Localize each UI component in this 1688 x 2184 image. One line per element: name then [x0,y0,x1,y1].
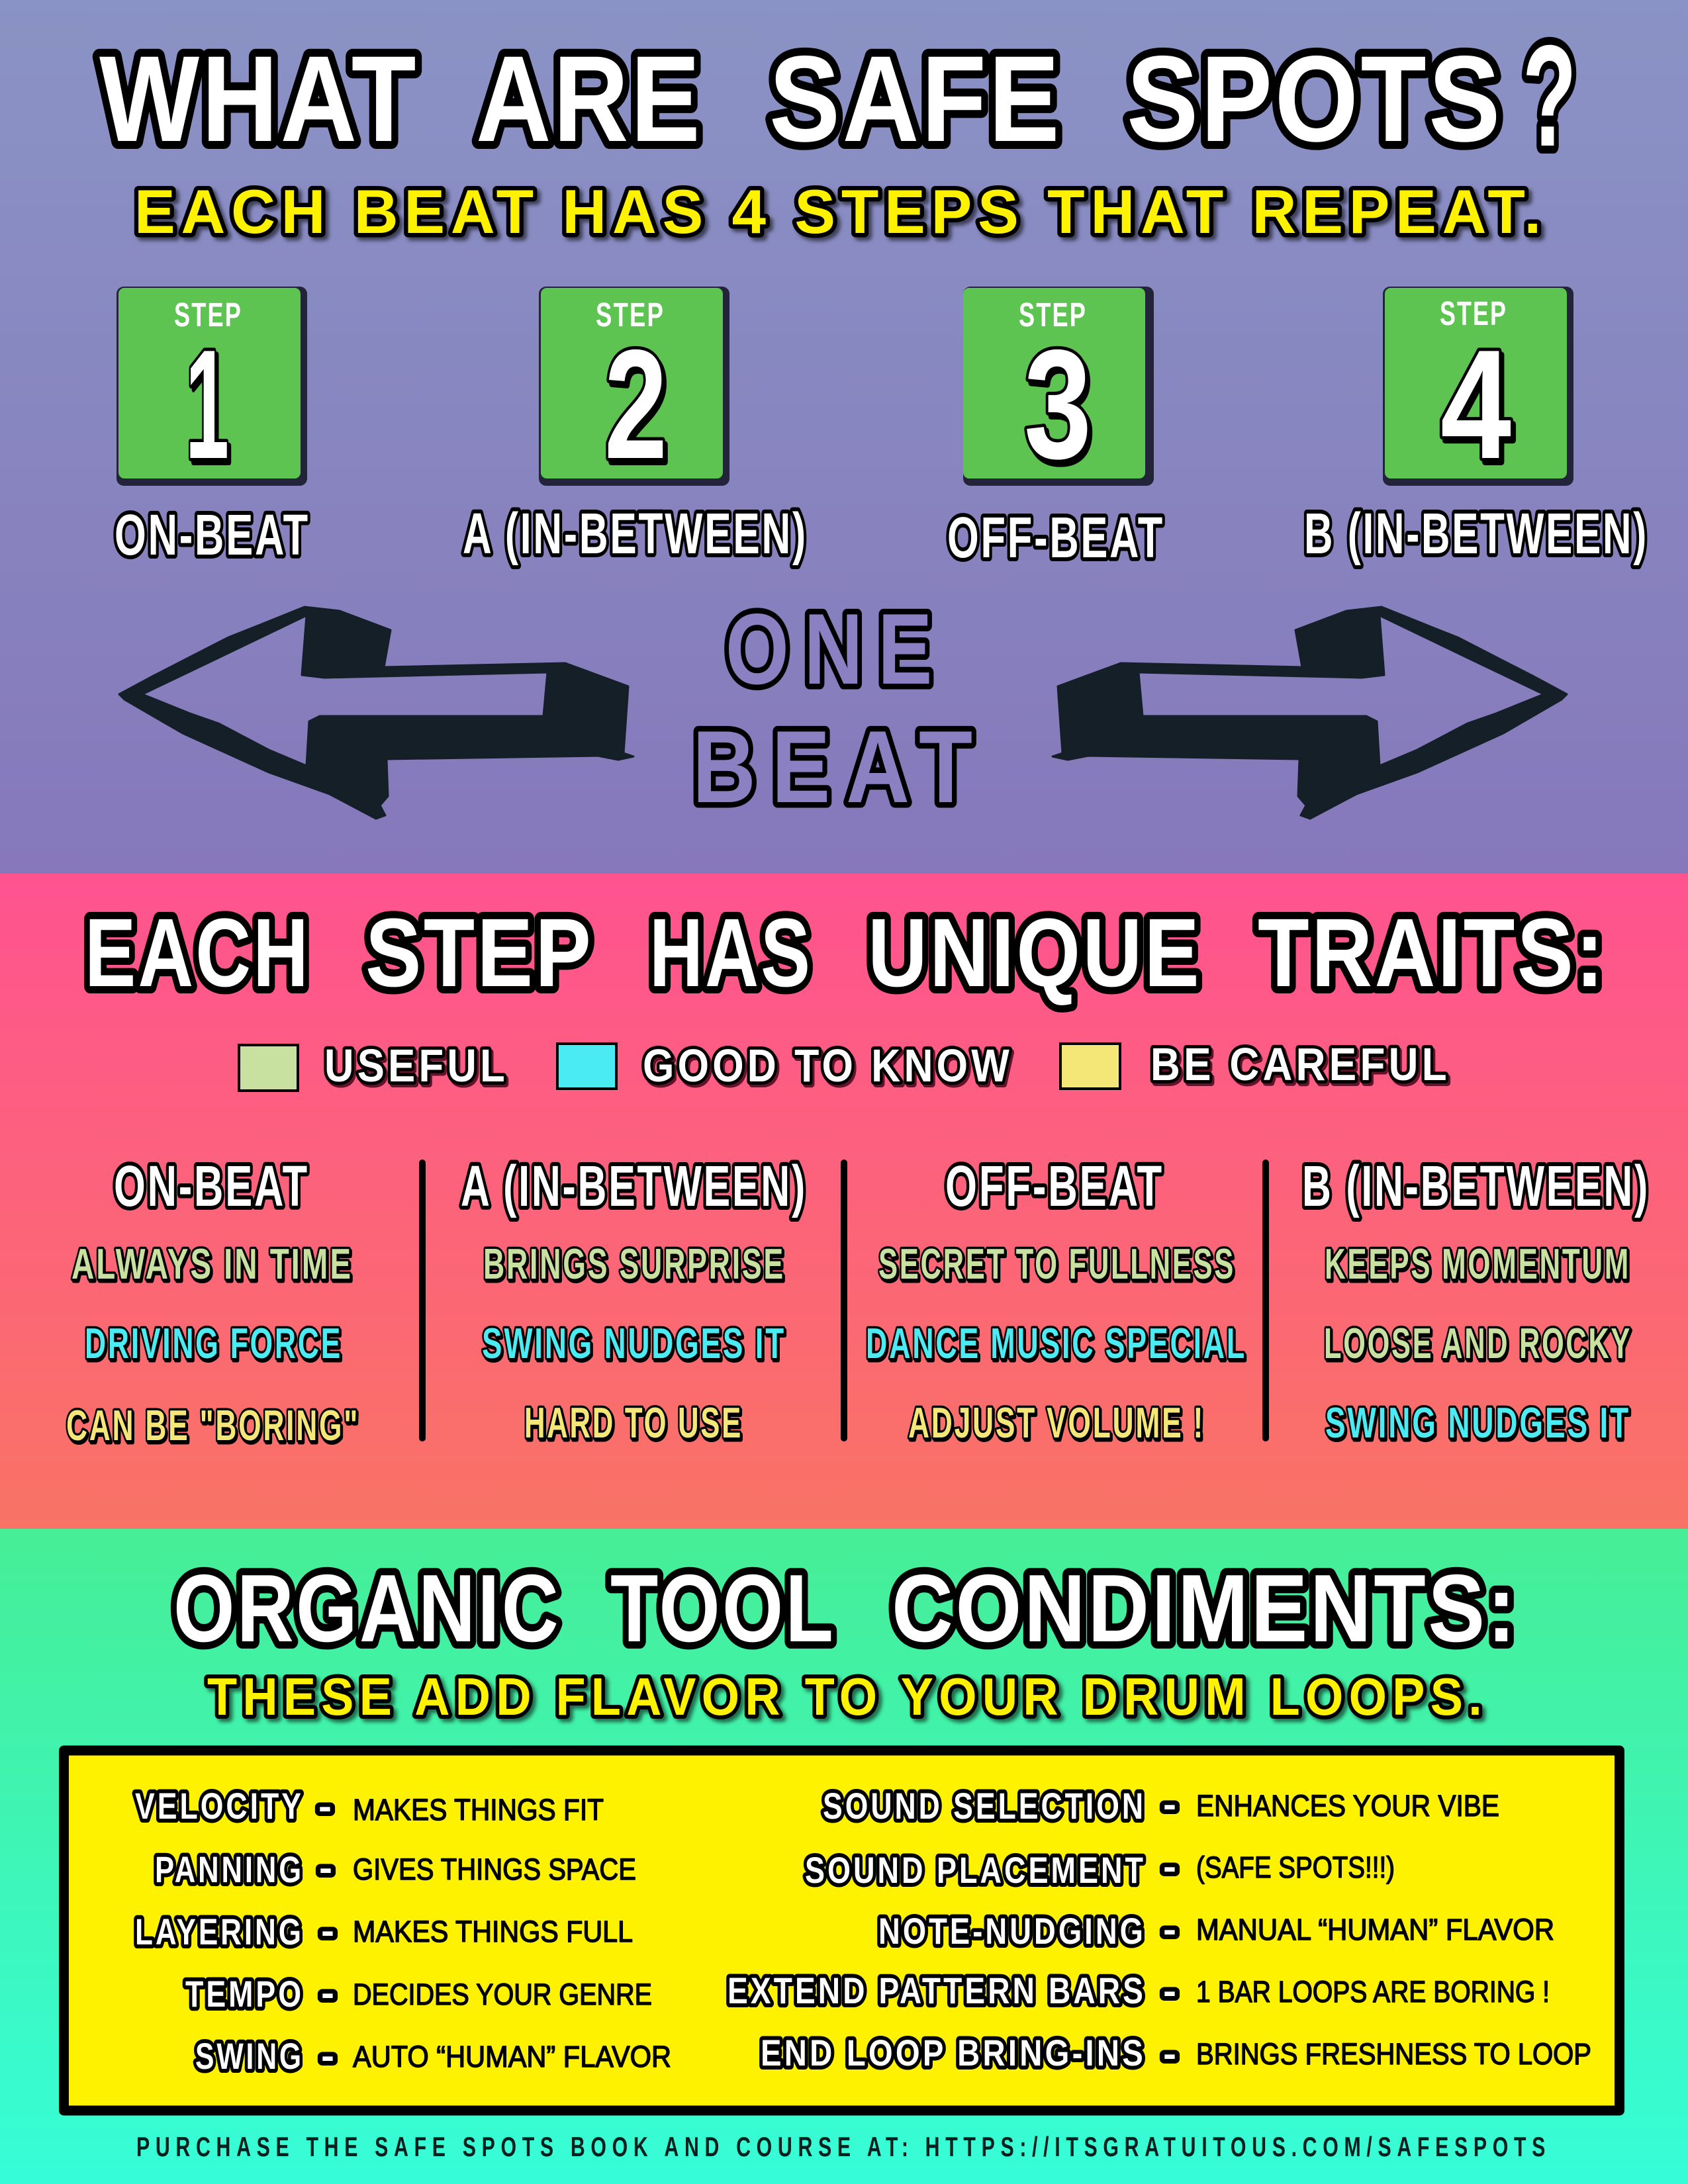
step card 4: STEP [1440,295,1507,332]
step label: on-beat: ON-BEAT [115,503,310,567]
column: off-beat: ADJUST VOLUME ! [908,1398,1205,1447]
row: end loop bring-ins: END LOOP BRING-INS [761,2032,1146,2073]
column: on-beat [66,1154,359,1449]
title: ARE [476,31,702,167]
arrow: right [1053,607,1567,819]
column: off-beat [866,1154,1246,1447]
legend: good to know: GOOD TO KNOW [643,1040,1013,1091]
row: layering [135,1909,633,1952]
row: layering: MAKES THINGS FULL [353,1915,633,1948]
row: swing [195,2034,671,2077]
legend: useful: USEFUL [324,1040,508,1091]
title: SPOTS [1127,31,1503,167]
row: note-nudging: NOTE-NUDGING [878,1910,1146,1952]
step card 3 [963,287,1154,491]
legend: be careful: BE CAREFUL [1150,1038,1450,1090]
row: panning: - [319,1846,332,1888]
row: velocity: MAKES THINGS FIT [353,1793,604,1827]
step card 4: 4 [1440,317,1511,491]
title: SAFE [769,31,1062,167]
column: a in-between [461,1154,807,1447]
column: on-beat: CAN BE "BORING" [66,1401,359,1449]
row: panning: PANNING [155,1848,304,1890]
row: sound selection: ENHANCES YOUR VIBE [1196,1789,1499,1823]
row: note-nudging: MANUAL “HUMAN” FLAVOR [1196,1913,1554,1946]
row: sound placement [805,1845,1395,1891]
row: velocity: - [318,1785,332,1827]
step card 1: 1 [185,317,229,491]
heading: each step has unique traits: TRAITS: [1258,899,1606,1007]
column: b in-between [1302,1154,1650,1447]
step card 2: 2 [604,317,667,491]
row: tempo: TEMPO [185,1973,304,2015]
panel: organic tool condiments [0,1529,1688,2184]
column: a in-between: BRINGS SURPRISE [483,1240,785,1288]
row: extend pattern bars [727,1970,1550,2011]
title: ? [1523,16,1578,177]
divider 2 [841,1163,847,1438]
column: off-beat: SECRET TO FULLNESS [878,1240,1235,1288]
row: panning: GIVES THINGS SPACE [353,1852,636,1886]
row: layering: - [321,1909,334,1951]
row: swing: AUTO “HUMAN” FLAVOR [353,2040,671,2073]
column: a in-between: A (IN-BETWEEN) [461,1154,807,1218]
row: sound selection: SOUND SELECTION [823,1785,1146,1827]
row: sound placement: SOUND PLACEMENT [805,1849,1146,1891]
row: swing: SWING [195,2035,304,2077]
heading: each step has unique traits: EACH [85,899,310,1007]
column: off-beat: OFF-BEAT [945,1154,1164,1218]
row: end loop bring-ins: BRINGS FRESHNESS TO LOOP [1196,2037,1591,2071]
title: WHAT [99,31,418,167]
divider 3 [1262,1163,1269,1438]
step card 1: STEP [174,296,242,334]
row: tempo: DECIDES YOUR GENRE [353,1978,652,2011]
step card 2: STEP [596,296,665,334]
panel: what are safe spots [0,0,1688,874]
column: a in-between: HARD TO USE [524,1398,743,1447]
column: on-beat: DRIVING FORCE [85,1319,342,1367]
one beat label: BEAT [692,709,988,824]
row: extend pattern bars: 1 BAR LOOPS ARE BORING ! [1196,1975,1550,2009]
one beat label [692,593,988,824]
heading: each step has unique traits: UNIQUE [868,899,1201,1007]
row: layering: LAYERING [135,1911,304,1952]
column: a in-between: SWING NUDGES IT [482,1319,786,1367]
step card 1 [117,287,307,491]
arrow: left [119,607,633,819]
step card 3: STEP [1019,296,1087,334]
row: end loop bring-ins: - [1163,2032,1176,2074]
column: on-beat: ALWAYS IN TIME [71,1240,353,1288]
subtitle: these add flavor: THESE ADD FLAVOR TO YOUR DRUM LOOPS. [207,1667,1487,1726]
step label: a in-between: A (IN-BETWEEN) [463,502,808,566]
divider 1 [419,1163,426,1438]
heading: organic tool condiments: ORGANIC [173,1555,561,1662]
row: note-nudging: - [1163,1908,1176,1950]
row: extend pattern bars: EXTEND PATTERN BARS [727,1970,1146,2011]
one beat label: ONE [726,593,947,705]
row: sound selection: - [1163,1783,1176,1825]
step label: off-beat: OFF-BEAT [947,506,1164,570]
row: end loop bring-ins [761,2032,1591,2074]
heading: each step has unique traits: HAS [649,899,812,1007]
row: swing: - [321,2034,334,2076]
column: off-beat: DANCE MUSIC SPECIAL [866,1319,1246,1367]
step card 2 [539,287,729,491]
legend: useful [239,1040,508,1091]
step card 3: 3 [1024,317,1092,491]
subtitle: EACH BEAT HAS 4 STEPS THAT REPEAT. [134,177,1547,246]
heading: organic tool condiments: CONDIMENTS: [892,1555,1518,1662]
row: note-nudging [878,1908,1554,1952]
row: tempo [185,1972,652,2015]
row: extend pattern bars: - [1163,1970,1176,2011]
step card 4 [1383,287,1573,491]
row: sound selection [823,1783,1499,1827]
row: sound placement: - [1163,1845,1176,1887]
row: tempo: - [321,1972,334,2013]
heading: organic tool condiments: TOOL [610,1555,834,1662]
row: velocity [135,1785,604,1827]
row: panning [155,1846,636,1890]
column: on-beat: ON-BEAT [114,1154,309,1218]
row: velocity: VELOCITY [135,1785,304,1827]
yellow panel [64,1751,1619,2111]
heading: each step has unique traits: STEP [365,899,592,1007]
panel: unique traits [0,874,1688,1529]
row: sound placement: (SAFE SPOTS!!!) [1196,1850,1395,1884]
